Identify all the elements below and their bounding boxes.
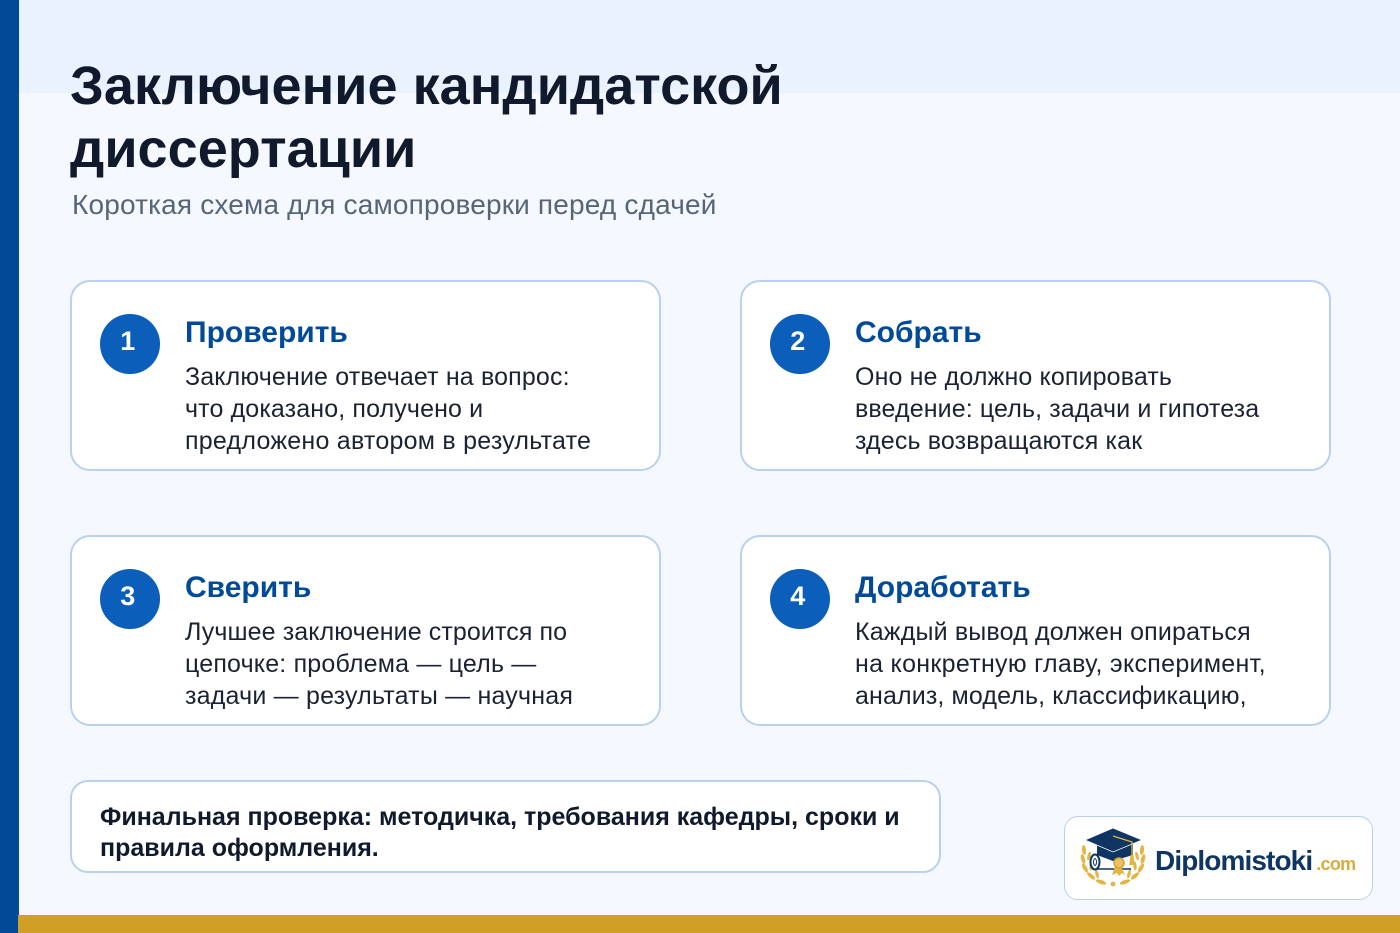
header band: [18, 0, 1400, 93]
text 4: [855, 618, 1266, 710]
card 3: [70, 535, 661, 726]
number 3: 3: [120, 581, 135, 611]
number 1: 1: [120, 326, 135, 356]
text 4: на конкретную главу, эксперимент,: [855, 650, 1266, 678]
icon: graduation cap with laurel: [1080, 828, 1146, 886]
bottom accent bar: [18, 915, 1400, 933]
heading: Сверить: Сверить: [185, 571, 311, 604]
number 1: [100, 314, 160, 374]
text 1: Заключение отвечает на вопрос:: [185, 363, 570, 391]
number 2: 2: [790, 326, 805, 356]
number 3: [100, 569, 160, 628]
text 2: введение: цель, задачи и гипотеза: [855, 395, 1259, 423]
heading: Доработать: Доработать: [855, 571, 1031, 604]
text 1: предложено автором в результате: [185, 427, 591, 455]
text 4: анализ, модель, классификацию,: [855, 682, 1247, 710]
text 3: [185, 618, 573, 710]
heading: Собрать: Собрать: [855, 316, 982, 349]
card 1: [70, 280, 661, 471]
title: [70, 56, 783, 179]
text 1: что доказано, получено и: [185, 395, 483, 423]
heading: Проверить: Проверить: [185, 316, 348, 349]
number 2: [770, 314, 830, 374]
text 3: цепочке: проблема — цель —: [185, 650, 536, 678]
text 2: здесь возвращаются как: [855, 427, 1142, 455]
subtitle: Короткая схема для самопроверки перед сдачей: [72, 189, 717, 220]
text 3: Лучшее заключение строится по: [185, 618, 567, 646]
text 2: Оно не должно копировать: [855, 363, 1172, 391]
left accent bar: [0, 0, 19, 933]
text 3: задачи — результаты — научная: [185, 682, 573, 710]
title: Заключение кандидатской: [70, 56, 783, 116]
final check callout: [70, 780, 941, 873]
number 4: [770, 569, 830, 628]
logo wordmark: Diplomistoki.com: [1155, 845, 1355, 876]
text 4: Каждый вывод должен опираться: [855, 618, 1251, 646]
title: диссертации: [70, 119, 416, 179]
final check callout: Финальная проверка: методичка, требования кафедры, сроки и: [100, 803, 900, 831]
number 4: 4: [790, 581, 805, 611]
card 2: [740, 280, 1331, 471]
card 4: [740, 535, 1331, 726]
final check callout: правила оформления.: [100, 834, 379, 862]
text 2: [855, 363, 1260, 455]
text 1: [185, 363, 591, 455]
logo box: [1064, 816, 1373, 900]
